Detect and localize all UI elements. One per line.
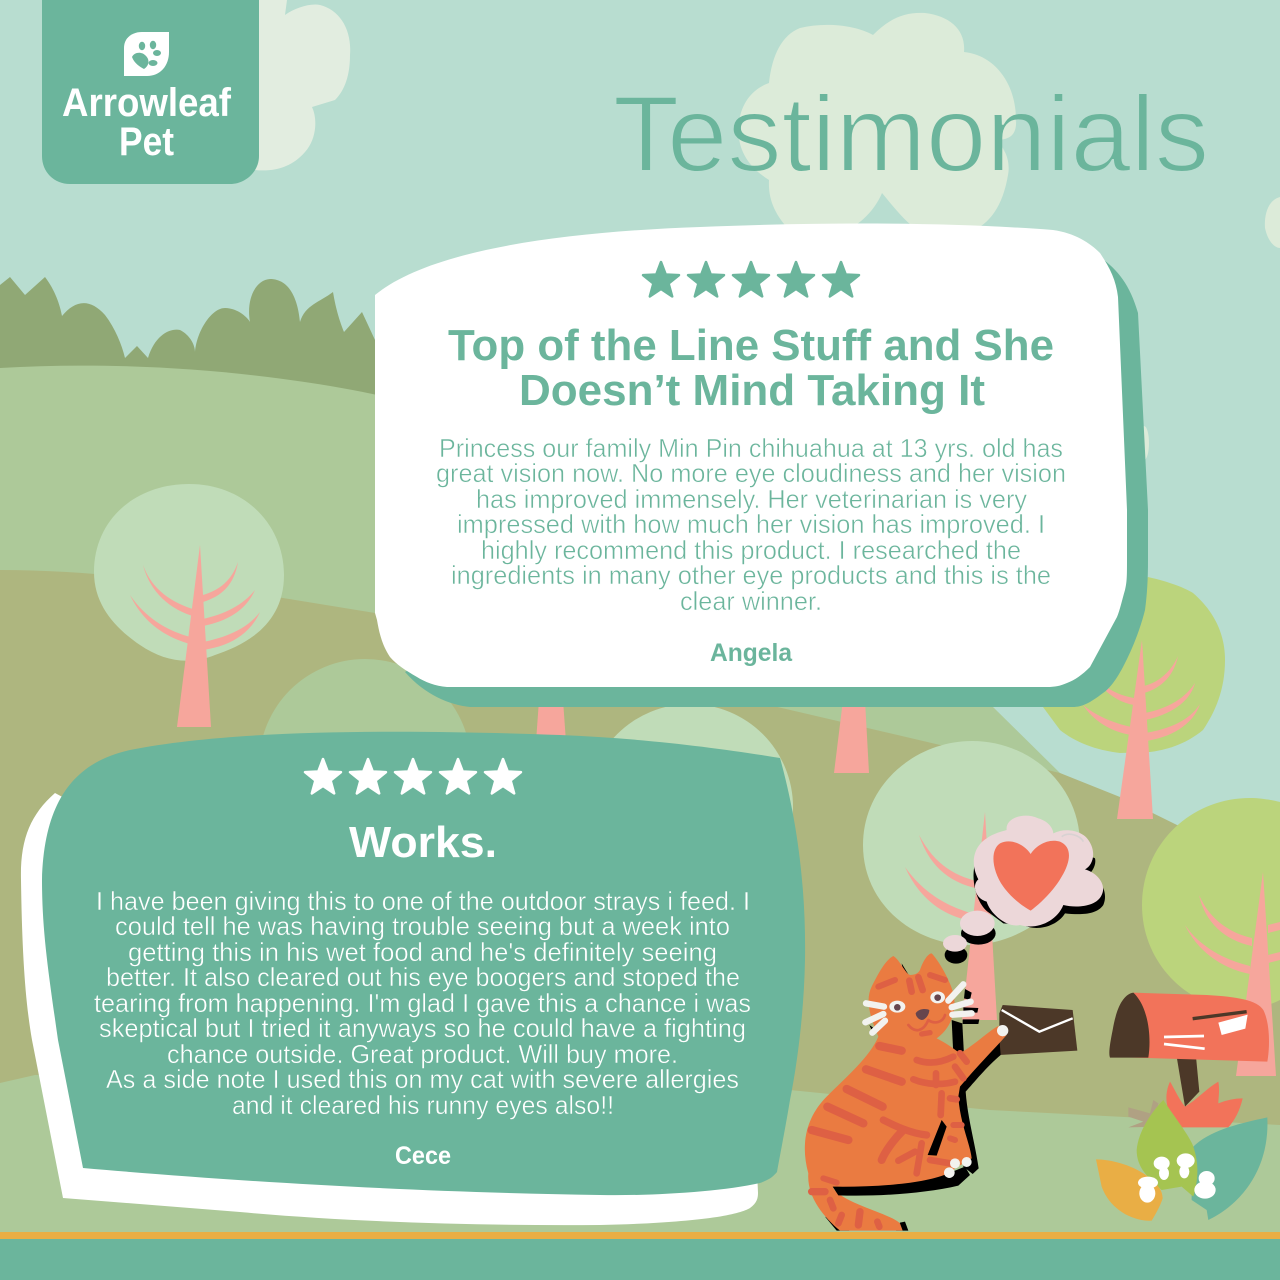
- thought bubble with heart: [943, 816, 1105, 964]
- light green hill: [0, 366, 1062, 900]
- tree behind cards: [587, 704, 793, 910]
- tree behind bottom card, small hump: [259, 659, 471, 871]
- review body: tearing from happening. I'm glad I gave this a chance i was: [94, 988, 751, 1018]
- review body: As a side note I used this on my cat with severe allergies: [106, 1064, 739, 1094]
- icon: leaf with paw: [124, 32, 169, 76]
- cat eyes and nose: [889, 991, 945, 1020]
- review body: [94, 886, 751, 1120]
- cat outline shadow: [825, 963, 1001, 1231]
- review body: [436, 433, 1066, 616]
- review body: and it cleared his runny eyes also!!: [232, 1090, 614, 1120]
- review body: I have been giving this to one of the outdoor strays i feed. I: [96, 886, 750, 916]
- review body: better. It also cleared out his eye boogers and stoped the: [106, 962, 740, 992]
- envelope: [999, 1005, 1077, 1055]
- review headline: [448, 321, 1054, 415]
- mailbox: [1109, 993, 1269, 1107]
- star rating: [305, 759, 521, 793]
- clouds: [240, 0, 1280, 460]
- panel: review Cece: [21, 732, 805, 1225]
- foreground hill: [0, 1075, 1280, 1232]
- tree right: [1043, 577, 1225, 819]
- tree centre right: [863, 741, 1080, 1020]
- panel: review Angela: [375, 224, 1148, 707]
- cat whiskers: [865, 984, 972, 1033]
- tree trunks behind top card: [536, 700, 869, 773]
- review body: Princess our family Min Pin chihuahua at 13 yrs. old has: [439, 433, 1063, 463]
- tree left: [94, 484, 284, 727]
- star rating: [643, 262, 859, 296]
- card shadow: [405, 257, 1148, 707]
- cat belly and leg outlines: [833, 1120, 970, 1196]
- card body: [375, 224, 1127, 687]
- tree far right: [1142, 798, 1280, 1076]
- review body: could tell he was having trouble seeing but a week into: [115, 911, 730, 941]
- review body: has improved immensely. Her veterinarian is very: [476, 484, 1027, 514]
- title: Testimonials: [613, 73, 1209, 194]
- review body: ingredients in many other eye products and this is the: [451, 560, 1051, 590]
- review headline: Top of the Line Stuff and She: [448, 321, 1054, 370]
- review body: getting this in his wet food and he's definitely seeing: [128, 937, 717, 967]
- review body: chance outside. Great product. Will buy more.: [167, 1039, 678, 1069]
- cat paws: [944, 1025, 1008, 1178]
- review headline: Doesn’t Mind Taking It: [519, 366, 985, 415]
- far bushes: [0, 277, 375, 400]
- review body: skeptical but I tried it anyways so he could have a fighting: [99, 1013, 746, 1043]
- cat: [805, 953, 1008, 1231]
- review body: highly recommend this product. I researched the: [481, 535, 1021, 565]
- card body: [42, 732, 805, 1195]
- reviewer name: Angela: [710, 639, 793, 667]
- logo wordmark: Arrowleaf: [62, 81, 232, 125]
- illustration: cat, mailbox and plants: [805, 816, 1269, 1231]
- footer band: [0, 1232, 1280, 1280]
- review body: great vision now. No more eye cloudiness and her vision: [436, 458, 1066, 488]
- cat body: [805, 953, 1007, 1231]
- review body: clear winner.: [680, 586, 822, 616]
- review body: impressed with how much her vision has improved. I: [457, 509, 1045, 539]
- olive hill: [0, 570, 1280, 1130]
- plants and paw prints: [1096, 1082, 1267, 1221]
- reviewer name: Cece: [395, 1142, 451, 1170]
- logo wordmark: [62, 81, 232, 164]
- logo badge: [42, 0, 259, 184]
- card shadow: [21, 793, 758, 1225]
- review headline: Works.: [349, 818, 497, 867]
- heart: [993, 841, 1069, 911]
- logo wordmark: Pet: [119, 120, 174, 164]
- cat stripes: [812, 975, 967, 1227]
